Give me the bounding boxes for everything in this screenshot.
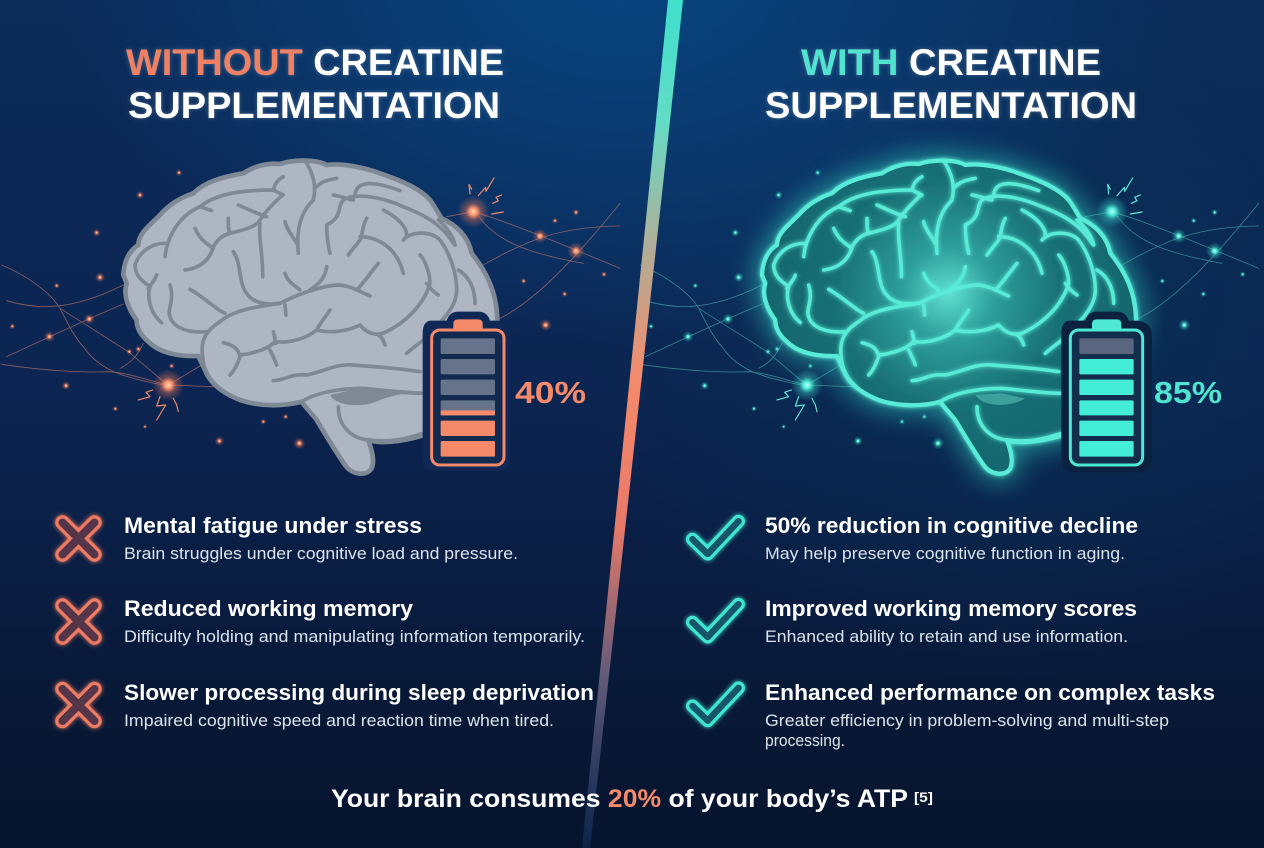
icon: check xyxy=(692,604,738,637)
panel: without creatine xyxy=(2,42,620,730)
item: mental fatigue xyxy=(62,513,518,563)
item: complex tasks: Greater efficiency in problem-solving and multi-step xyxy=(765,712,1169,730)
title: with creatine: WITH CREATINE xyxy=(801,42,1101,83)
panel: with creatine xyxy=(640,42,1259,750)
item: slower processing: Impaired cognitive speed and reaction time when tired. xyxy=(124,712,554,730)
grey brain illustration with neural sparks xyxy=(2,161,620,474)
item: working memory: Reduced working memory xyxy=(124,596,414,621)
title: without creatine: SUPPLEMENTATION xyxy=(128,85,500,126)
item: complex tasks: processing. xyxy=(765,732,845,750)
item: working memory scores: Enhanced ability to retain and use information. xyxy=(765,628,1128,646)
item: cognitive decline: May help preserve cognitive function in aging. xyxy=(765,545,1125,563)
battery percentage 85%: 85% xyxy=(1154,375,1222,410)
battery icon 40% xyxy=(423,312,510,471)
icon: cross xyxy=(62,689,94,721)
title: with creatine xyxy=(765,42,1137,126)
item: complex tasks xyxy=(692,680,1215,750)
battery percentage 40%: 40% xyxy=(515,375,586,410)
icon: check xyxy=(692,688,738,721)
icon: cross xyxy=(62,522,94,554)
glowing teal brain illustration with neural sparks xyxy=(640,161,1259,474)
title: with creatine: SUPPLEMENTATION xyxy=(765,85,1137,126)
item: complex tasks: Enhanced performance on complex tasks xyxy=(765,680,1215,705)
item: working memory scores: Improved working memory scores xyxy=(765,596,1137,621)
item: mental fatigue: Mental fatigue under stress xyxy=(124,513,422,538)
item: cognitive decline: 50% reduction in cognitive decline xyxy=(765,513,1138,538)
item: mental fatigue: Brain struggles under cognitive load and pressure. xyxy=(124,545,518,563)
item: working memory xyxy=(62,596,585,646)
footer statement: [5] xyxy=(914,789,933,805)
item: slower processing: Slower processing during sleep deprivation xyxy=(124,680,594,705)
center divider xyxy=(582,0,683,848)
item: slower processing xyxy=(62,680,594,730)
item: cognitive decline xyxy=(692,513,1138,563)
icon: check xyxy=(692,521,738,554)
title: without creatine: WITHOUT CREATINE xyxy=(126,42,504,83)
footer statement: Your brain consumes 20% of your body’s ATP xyxy=(331,785,908,813)
battery icon 85% xyxy=(1061,312,1152,473)
icon: cross xyxy=(62,606,94,638)
title: without creatine xyxy=(126,42,504,126)
item: working memory: Difficulty holding and manipulating information temporarily. xyxy=(124,628,585,646)
item: working memory scores xyxy=(692,596,1137,646)
